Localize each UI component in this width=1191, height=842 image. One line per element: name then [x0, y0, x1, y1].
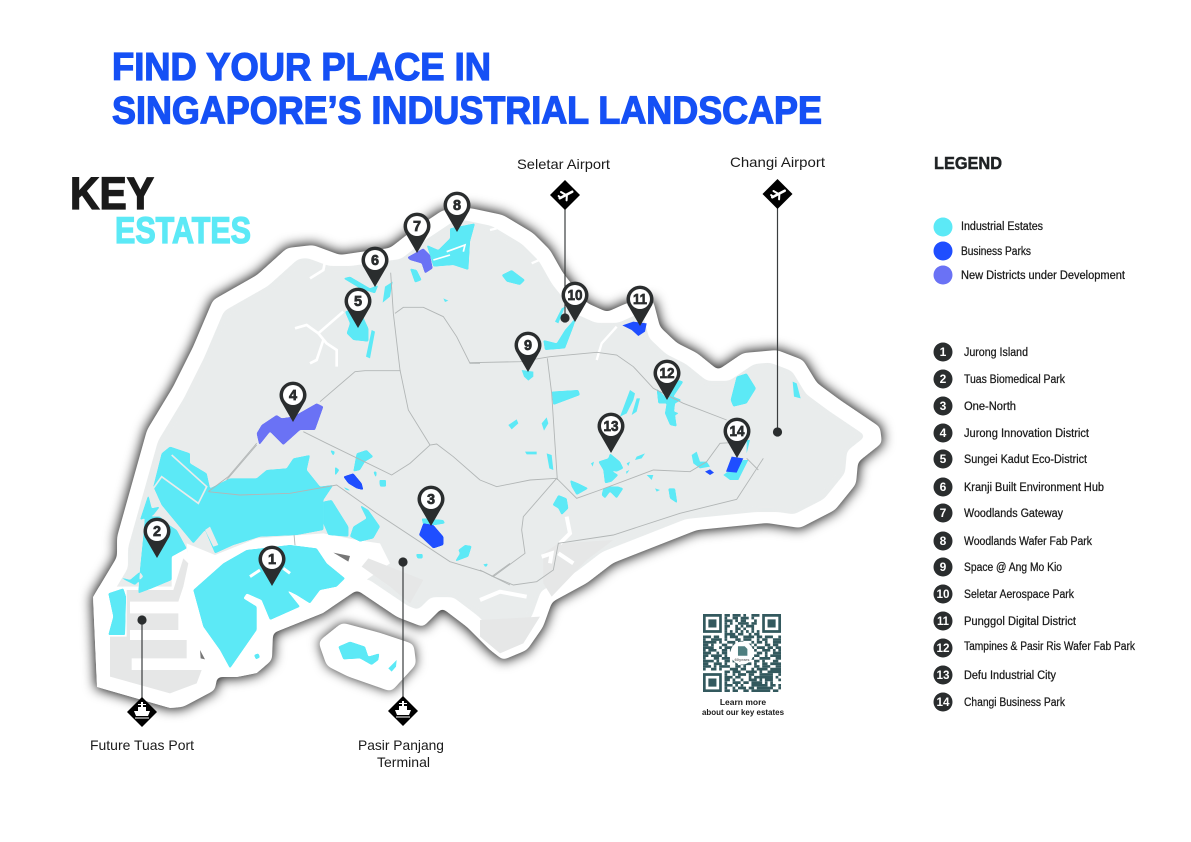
title — [112, 46, 822, 132]
pin 10 — [562, 282, 588, 322]
pin 5 — [344, 288, 372, 328]
legend: numbered estates list: Jurong Innovation District — [964, 428, 1090, 440]
pin 13 — [598, 413, 624, 453]
legend: numbered estates list: Sungei Kadut Eco-District — [964, 454, 1088, 466]
key estates heading: KEY — [70, 168, 154, 219]
callout: Future Tuas Port: Future Tuas Port — [90, 737, 194, 753]
legend: numbered estates list: Tuas Biomedical Park — [964, 374, 1065, 386]
pin 11: 11 — [633, 292, 647, 308]
legend: numbered estates list: Jurong Island — [964, 347, 1028, 359]
pin 4 — [280, 382, 306, 422]
legend: area types: Industrial Estates — [961, 221, 1043, 233]
callout: Future Tuas Port — [90, 615, 194, 753]
pin 14 — [724, 418, 750, 458]
legend: numbered estates list: 7 — [940, 506, 947, 520]
legend: numbered estates list: 12 — [936, 641, 950, 655]
legend: numbered estates list: 8 — [940, 534, 947, 548]
pin 7: 7 — [413, 219, 421, 235]
legend: numbered estates list: Space @ Ang Mo Kio — [964, 562, 1062, 574]
QR code: 60years — [735, 657, 750, 662]
title: FIND YOUR PLACE IN — [112, 46, 491, 89]
QR caption: Learn more — [720, 697, 766, 707]
west and south-west detail — [93, 534, 390, 708]
island white base — [93, 208, 882, 708]
legend: numbered estates list: Woodlands Wafer Fab Park — [964, 536, 1092, 548]
legend: numbered estates list: Kranji Built Environment Hub — [964, 482, 1104, 494]
pin 8 — [444, 192, 470, 232]
callout: Changi Airport: Changi Airport — [730, 154, 825, 170]
pin 3: 3 — [427, 492, 435, 508]
QR code — [703, 614, 781, 692]
legend: numbered estates list: 10 — [936, 587, 950, 601]
key estates heading — [70, 168, 251, 251]
callout: Changi Airport — [730, 154, 825, 437]
legend: numbered estates list: One-North — [964, 401, 1016, 413]
legend: area types — [934, 218, 1126, 284]
north and west detail — [227, 223, 480, 480]
legend: numbered estates list: Defu Industrial City — [964, 670, 1056, 682]
pin 13: 13 — [604, 419, 618, 435]
legend: area types: Business Parks — [961, 246, 1031, 258]
legend: numbered estates list: 11 — [937, 614, 949, 628]
Sentosa island estates — [338, 642, 397, 672]
callout: Pasir Panjang Terminal: Terminal — [377, 754, 430, 770]
pin 11 — [626, 286, 654, 326]
QR caption — [702, 697, 784, 717]
legend: numbered estates list: 9 — [940, 560, 947, 574]
legend: numbered estates list: Woodlands Gateway — [964, 508, 1063, 520]
QR caption: about our key estates — [702, 707, 784, 717]
north-east detail — [470, 228, 801, 480]
pin 4: 4 — [289, 388, 297, 404]
pin 3 — [418, 486, 444, 526]
callout: Seletar Airport: Seletar Airport — [517, 156, 610, 172]
pin 6: 6 — [371, 253, 379, 269]
legend: numbered estates list: 13 — [936, 668, 950, 682]
callout: Pasir Panjang Terminal: Pasir Panjang — [358, 737, 444, 753]
legend: numbered estates list: 5 — [940, 452, 947, 466]
legend: numbered estates list: 14 — [936, 695, 950, 709]
pin 10: 10 — [568, 288, 582, 304]
pin 9: 9 — [524, 338, 532, 354]
legend: numbered estates list: 4 — [940, 426, 947, 440]
pin 12: 12 — [660, 366, 674, 382]
pin 5: 5 — [354, 294, 362, 310]
legend: numbered estates list: 2 — [940, 372, 947, 386]
legend: numbered estates list: Seletar Aerospace Park — [964, 589, 1074, 601]
title: SINGAPORE’S INDUSTRIAL LANDSCAPE — [112, 90, 822, 132]
pin 7 — [404, 213, 430, 253]
land mass — [93, 208, 882, 708]
legend: numbered estates list: Changi Business Park — [964, 697, 1065, 709]
south-east detail — [480, 440, 763, 653]
pin 2 — [144, 518, 170, 558]
callout: Seletar Airport — [517, 156, 610, 323]
legend: numbered estates list: 6 — [940, 480, 947, 494]
pin 2: 2 — [153, 524, 161, 540]
pin 9 — [514, 332, 542, 372]
pin 14: 14 — [730, 424, 744, 440]
legend: area types: New Districts under Development — [961, 270, 1126, 282]
legend: numbered estates list: Punggol Digital District — [964, 616, 1077, 628]
legend: numbered estates list — [934, 342, 1135, 712]
legend heading: LEGEND — [934, 153, 1002, 173]
map of Singapore — [90, 208, 882, 710]
key estates heading: ESTATES — [115, 210, 251, 251]
legend: numbered estates list: Tampines & Pasir Ris Wafer Fab Park — [964, 641, 1135, 653]
legend: numbered estates list: 1 — [940, 345, 947, 359]
pin 8: 8 — [453, 198, 461, 214]
legend: numbered estates list: 3 — [940, 399, 947, 413]
pin 1 — [258, 546, 286, 586]
island shadow — [93, 208, 882, 708]
pin 12 — [654, 360, 680, 400]
callout: Pasir Panjang Terminal — [358, 557, 444, 770]
pin 6 — [362, 247, 388, 287]
pin 1: 1 — [268, 552, 276, 568]
